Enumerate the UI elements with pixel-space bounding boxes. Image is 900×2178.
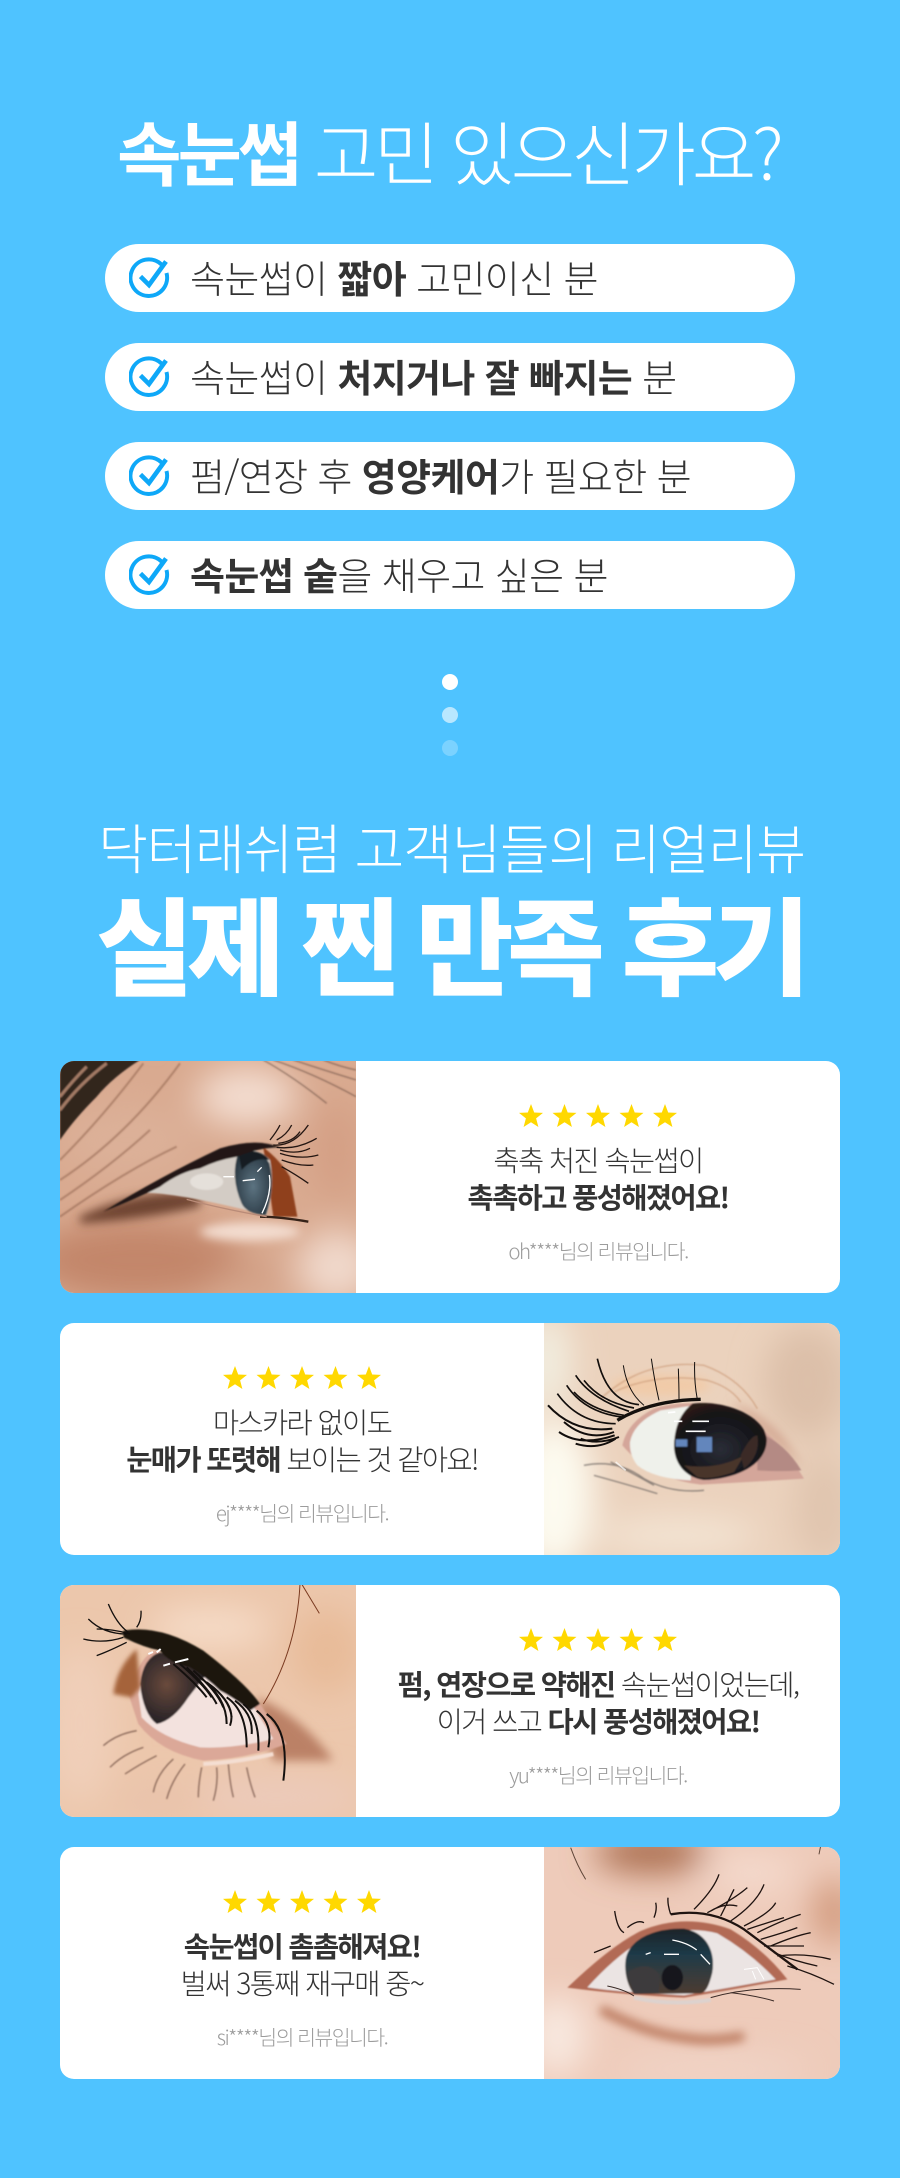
three fading dots <box>442 674 458 756</box>
review line 2: 눈매가 또렷해 보이는 것 같아요! <box>126 1438 478 1479</box>
review text 3 <box>398 1628 798 1789</box>
review line 2: 촉촉하고 풍성해졌어요! <box>468 1176 728 1217</box>
review line 1: 속눈썹이 촘촘해져요! <box>184 1925 420 1966</box>
panel: checklist <box>105 244 795 609</box>
review line 2: 벌써 3통째 재구매 중~ <box>181 1962 423 2003</box>
review text 4 <box>181 1890 424 2051</box>
reviewer id: oh****님의 리뷰입니다. <box>508 1235 688 1265</box>
icon: check <box>129 455 170 496</box>
panel: review card 4 <box>60 1847 840 2079</box>
review text 2 <box>126 1366 478 1527</box>
five stars <box>519 1628 677 1651</box>
photo: eye side view with grey iris <box>60 1061 636 1293</box>
reviewer id: yu****님의 리뷰입니다. <box>509 1759 687 1789</box>
photo: eye with long curled lashes <box>544 1323 840 1555</box>
panel: review card 1 <box>60 1061 840 1293</box>
five stars <box>519 1104 677 1127</box>
photo: front eye with dark iris <box>544 1847 840 2079</box>
panel: review card 2 <box>60 1323 840 1555</box>
item text 4: 속눈썹 숱을 채우고 싶은 분 <box>190 546 608 601</box>
icon: check <box>129 356 170 397</box>
title: eyelash worries: 속눈썹 고민 있으신가요? <box>117 100 780 201</box>
reviewer id: ej****님의 리뷰입니다. <box>216 1497 388 1527</box>
five stars <box>223 1366 381 1389</box>
checklist item 3 <box>105 442 795 510</box>
review text 1 <box>262 1104 728 1265</box>
icon: check <box>129 257 170 298</box>
heading: real satisfaction reviews: 실제 찐 만족 후기 <box>96 864 804 1018</box>
five stars <box>223 1890 381 1913</box>
checklist item 4 <box>105 541 795 609</box>
review line 1: 마스카라 없이도 <box>213 1401 391 1442</box>
item text 2: 속눈썹이 처지거나 잘 빠지는 분 <box>190 348 677 403</box>
review line 2: 이거 쓰고 다시 풍성해졌어요! <box>437 1700 759 1741</box>
item text 1: 속눈썹이 짧아 고민이신 분 <box>190 249 598 304</box>
photo: side eye looking down with lashes <box>60 1585 356 1817</box>
item text 3: 펌/연장 후 영양케어가 필요한 분 <box>190 447 691 502</box>
panel: review card 3 <box>60 1585 840 1817</box>
checklist item 1 <box>105 244 795 312</box>
review line 1: 축축 처진 속눈썹이 <box>493 1139 703 1180</box>
reviewer id: si****님의 리뷰입니다. <box>217 2021 387 2051</box>
review line 1: 펌, 연장으로 약해진 속눈썹이었는데, <box>398 1663 798 1704</box>
icon: check <box>129 554 170 595</box>
checklist item 2 <box>105 343 795 411</box>
subtitle: real reviews: 닥터래쉬럼 고객님들의 리얼리뷰 <box>98 806 805 885</box>
